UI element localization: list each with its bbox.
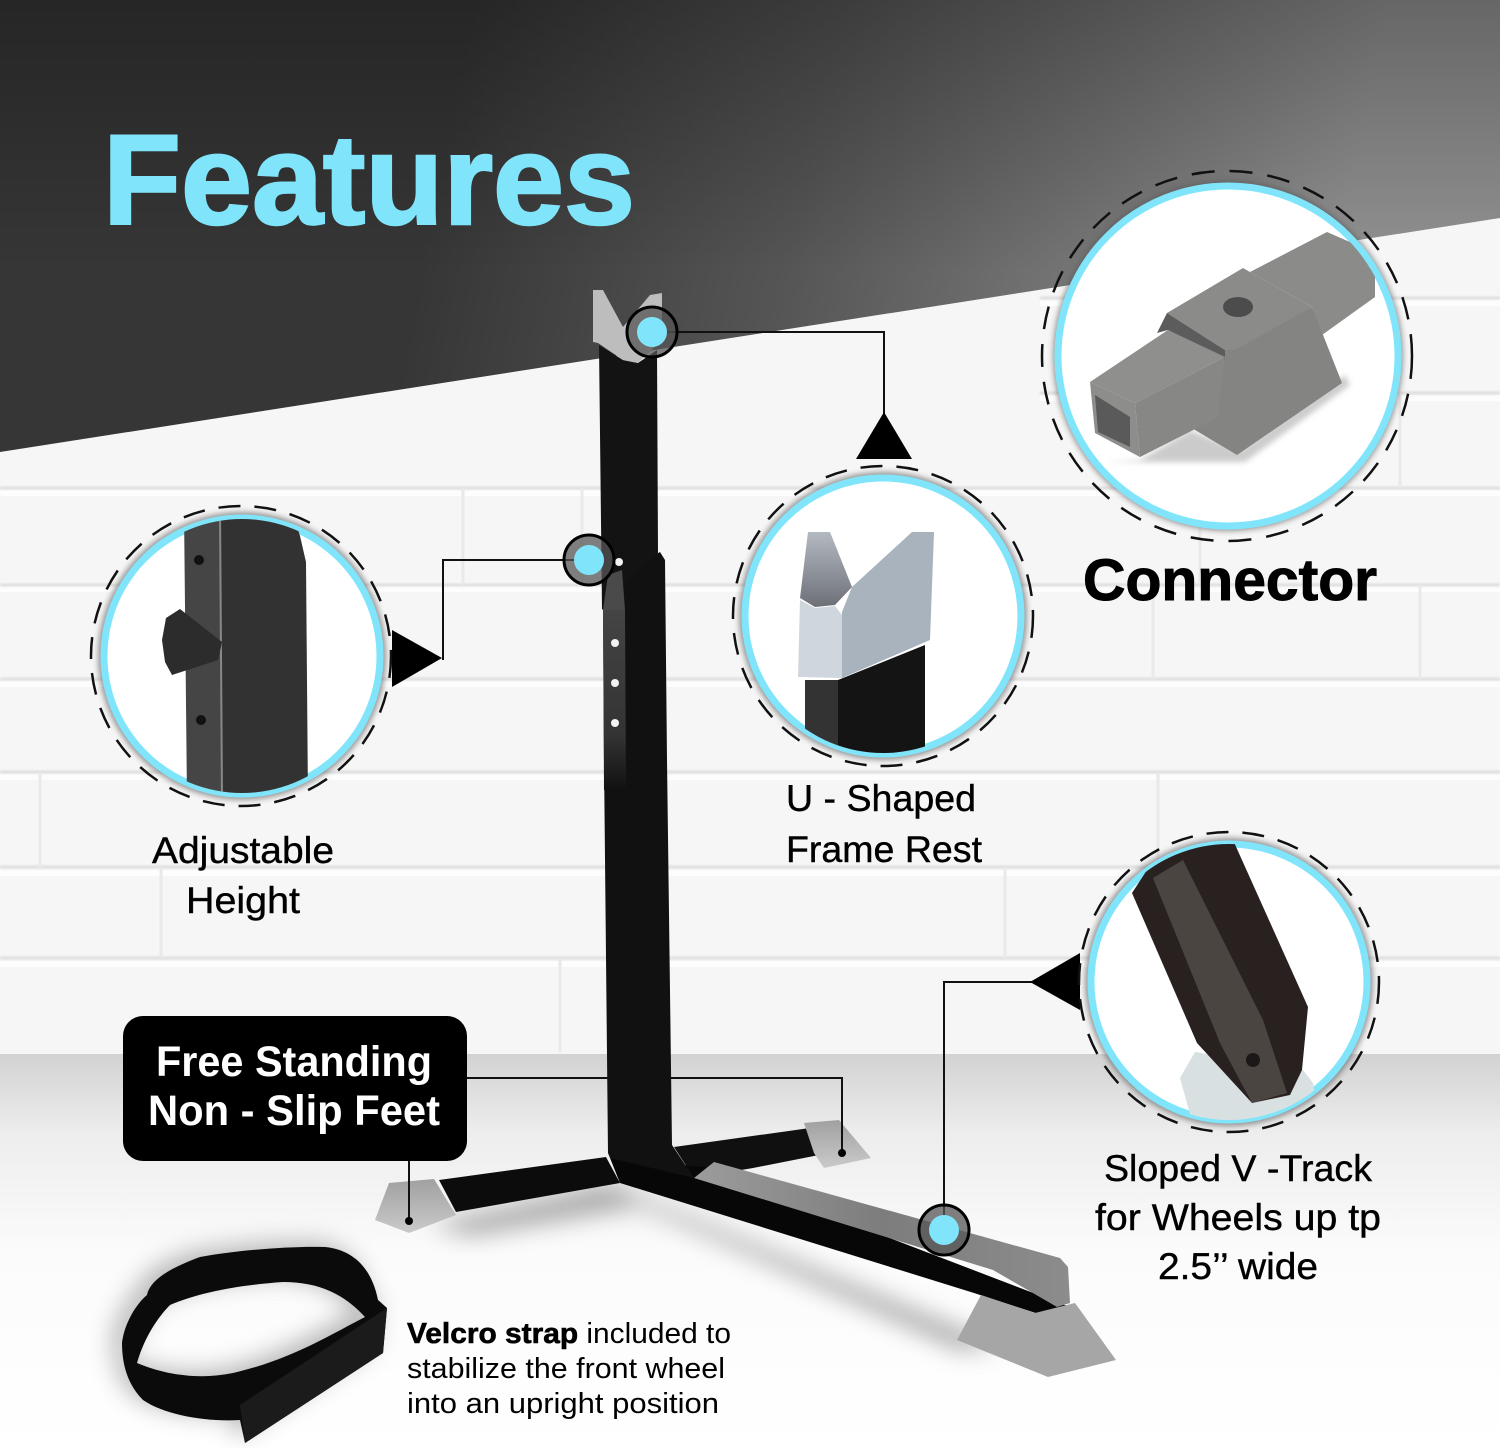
bike stand product <box>375 290 1116 1377</box>
label: sloped V-track: for Wheels up tp <box>1095 1197 1381 1238</box>
icon: velcro strap <box>112 1242 387 1443</box>
lighter hole strip <box>603 610 626 790</box>
label: U-shaped frame rest <box>786 778 983 870</box>
velcro strap text <box>407 1318 731 1420</box>
upper post <box>599 345 658 610</box>
floor shadow under stand <box>430 1185 1000 1350</box>
label: adjustable height: Height <box>186 880 301 921</box>
callout: free standing non-slip feet: Non - Slip Feet <box>148 1087 440 1135</box>
callout lines <box>409 332 1040 1230</box>
velcro strap text: Velcro strap included to <box>407 1318 731 1350</box>
collar highlight <box>603 570 625 610</box>
callout markers <box>564 307 969 1255</box>
left arm <box>439 1157 620 1212</box>
adjustment holes <box>611 558 623 727</box>
rear arm <box>674 1127 819 1178</box>
callout arrows <box>392 412 1080 1225</box>
label: sloped V-track: Sloped V -Track <box>1104 1148 1372 1189</box>
detail circle: sloped V-track <box>1079 832 1379 1132</box>
label: adjustable height: Adjustable <box>152 830 334 871</box>
label: sloped V-track: 2.5’’ wide <box>1158 1246 1318 1287</box>
brick wall background <box>0 0 1500 1060</box>
velcro strap text: into an upright position <box>407 1388 719 1420</box>
left foot <box>375 1179 456 1233</box>
label: adjustable height <box>152 830 334 921</box>
label: U-shaped frame rest: U - Shaped <box>786 778 976 819</box>
callout: free standing non-slip feet <box>123 1016 467 1161</box>
lower post <box>603 552 694 1178</box>
floor <box>0 1054 1500 1448</box>
U-shaped rest on post <box>593 290 662 363</box>
rear foot <box>804 1120 871 1168</box>
front foot <box>957 1295 1116 1377</box>
label: sloped V-track <box>1095 1148 1381 1287</box>
callout: free standing non-slip feet: Free Standing <box>156 1038 432 1086</box>
gray track on long arm <box>694 1162 1070 1307</box>
label: connector: Connector <box>1083 548 1377 613</box>
title: Features <box>103 109 635 252</box>
velcro strap text: stabilize the front wheel <box>407 1353 725 1385</box>
detail circle: connector <box>1042 171 1412 541</box>
long front arm <box>610 1158 1070 1317</box>
detail circle: U-shaped frame rest <box>733 466 1033 766</box>
detail circle: adjustable height <box>91 506 391 806</box>
label: U-shaped frame rest: Frame Rest <box>786 829 983 870</box>
dark diagonal header band <box>0 0 1500 452</box>
